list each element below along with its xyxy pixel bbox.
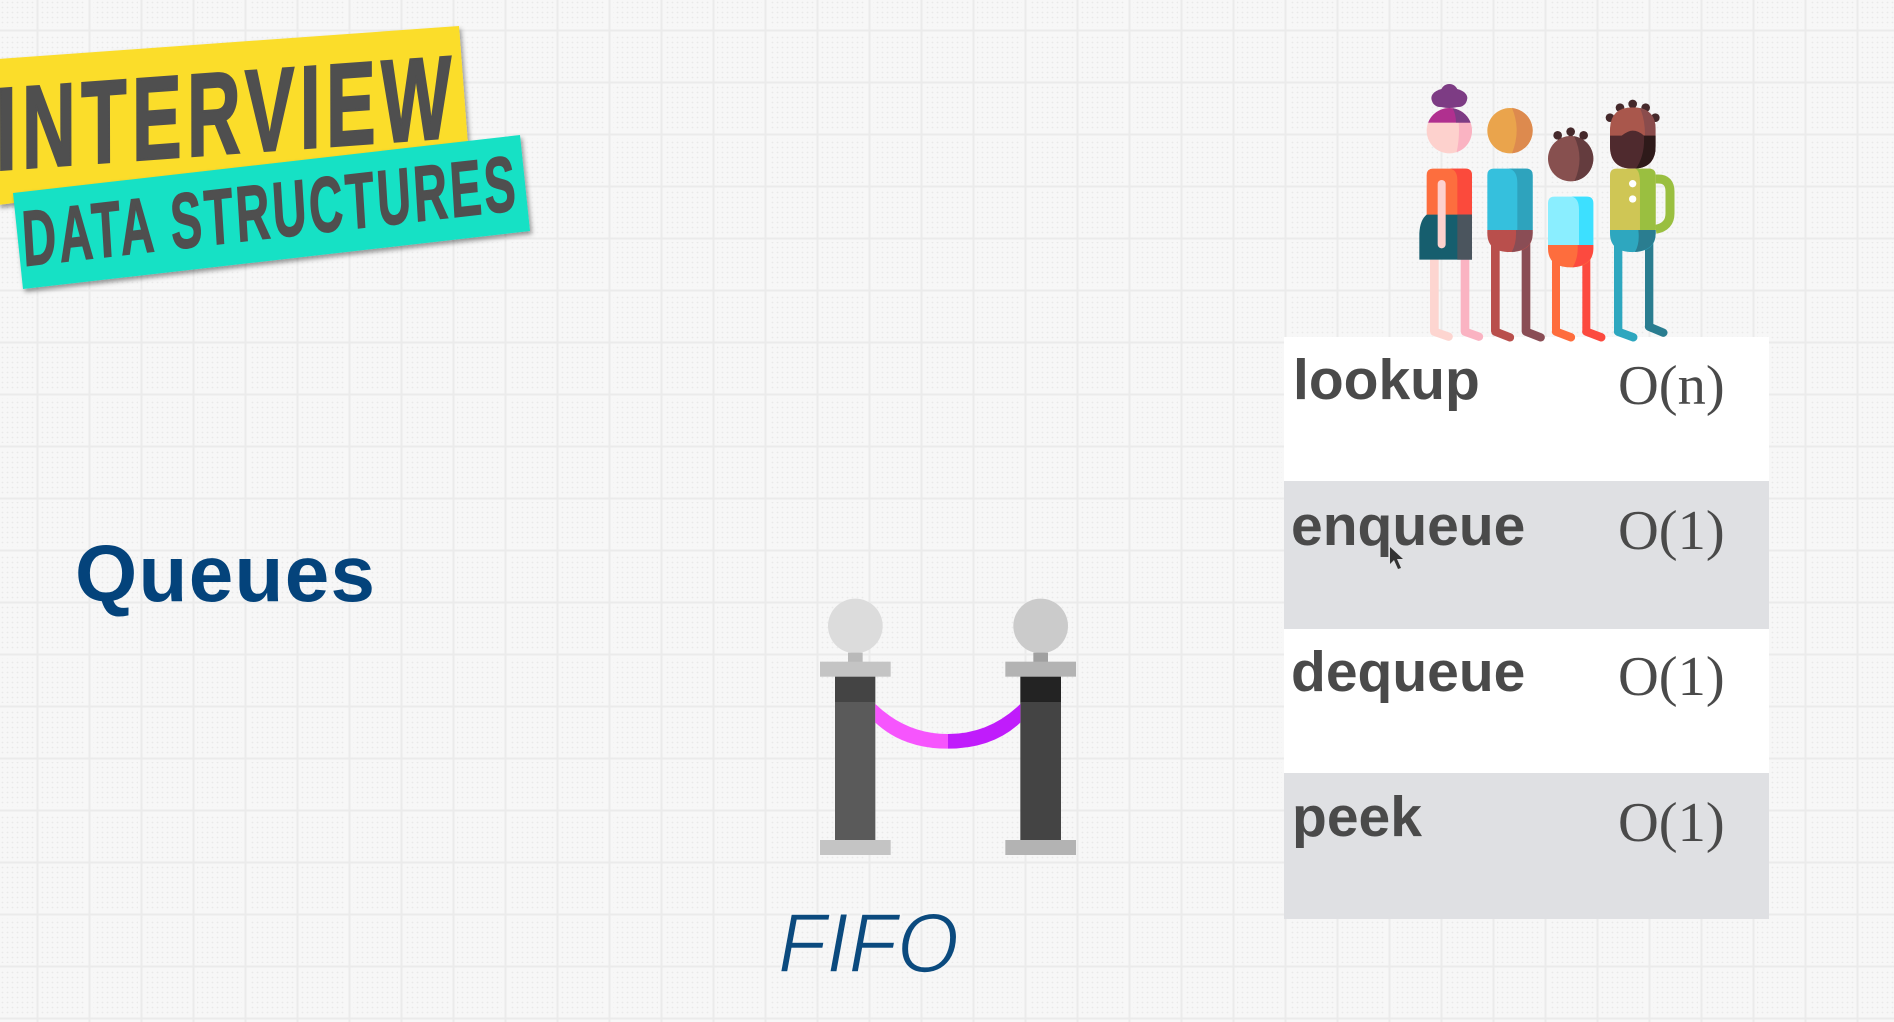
row: enqueue	[1284, 481, 1769, 629]
person 2	[1487, 107, 1541, 337]
person 1	[1419, 84, 1479, 337]
icon: four people queueing	[1419, 84, 1670, 337]
row: enqueue: O(1)	[1618, 500, 1725, 562]
subtitle banner: Data Structures	[13, 135, 530, 289]
person 3	[1548, 127, 1601, 337]
icon: barrier posts with rope	[820, 599, 1076, 855]
person 4	[1606, 100, 1670, 337]
row: dequeue: O(1)	[1618, 646, 1725, 708]
icon: mouse cursor	[1390, 547, 1403, 569]
table: queue operation complexity	[1284, 337, 1769, 919]
title text: Interview: INTERVIEW	[0, 31, 457, 195]
row: dequeue	[1284, 629, 1769, 774]
title banner: Interview	[0, 26, 468, 205]
row: lookup: lookup	[1293, 348, 1480, 412]
row: peek: O(1)	[1618, 792, 1725, 854]
subtitle text: Data Structures: DATA STRUCTURES	[20, 139, 521, 283]
row: dequeue: dequeue	[1291, 640, 1525, 704]
row: lookup: O(n)	[1618, 355, 1725, 417]
heading: Queues: Queues	[75, 529, 375, 618]
row: peek: peek	[1292, 785, 1422, 849]
row: lookup	[1284, 337, 1769, 481]
row: enqueue: enqueue	[1291, 494, 1525, 558]
label: FIFO: FIFO	[778, 896, 959, 990]
row: peek	[1284, 773, 1769, 919]
